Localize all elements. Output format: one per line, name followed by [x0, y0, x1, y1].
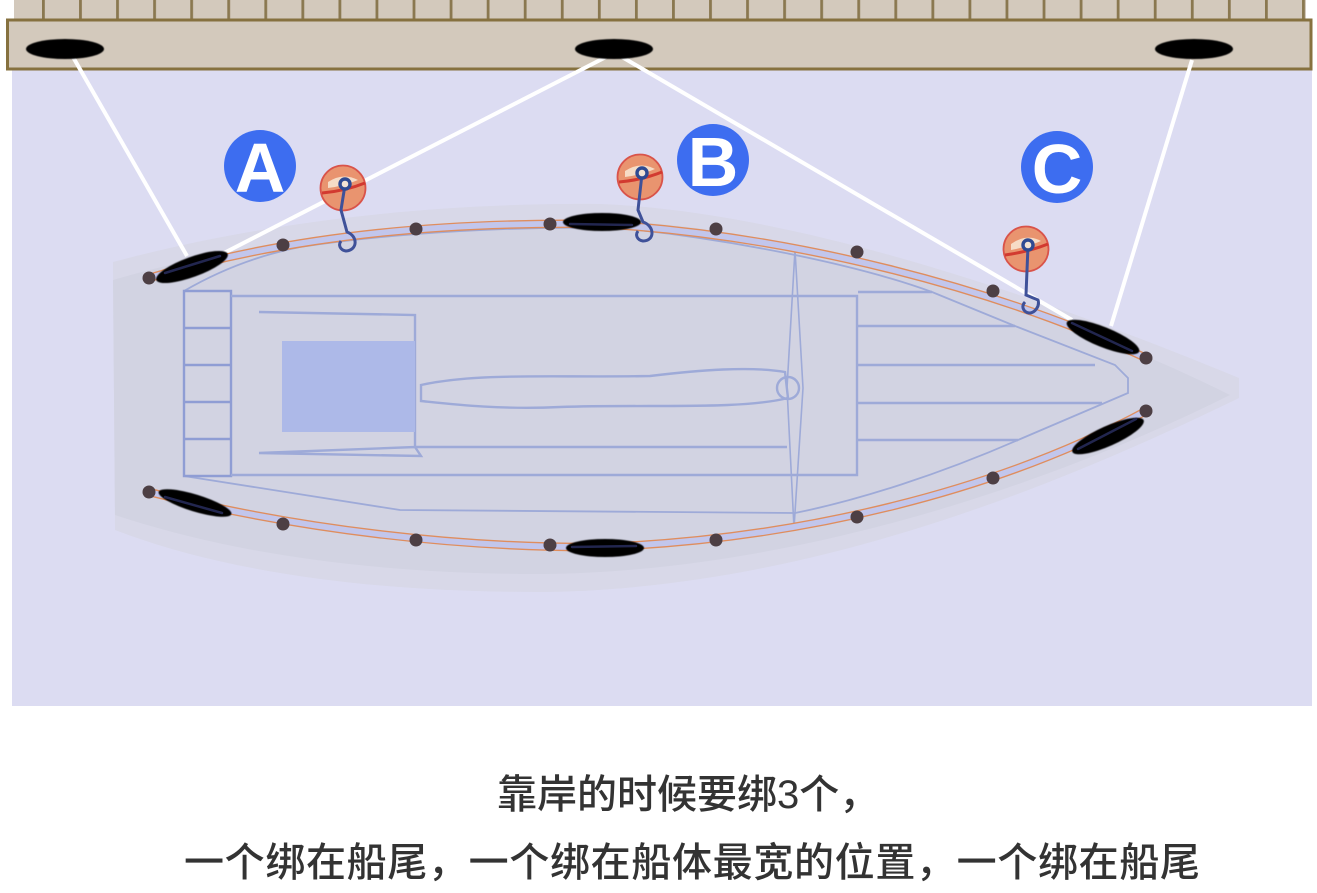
tiller: [421, 369, 788, 408]
fender A: [320, 166, 366, 251]
panel: water background: [12, 60, 1312, 706]
cleat rail overlays: [165, 224, 1136, 547]
dock: [8, 0, 1311, 69]
boat deck plan: [184, 228, 1128, 528]
caption: 靠岸的时候要绑3个，: [497, 773, 879, 817]
caption: [184, 773, 1200, 885]
inner hull outline: [184, 228, 1128, 513]
rail studs: [142, 218, 1152, 552]
cabin frame: [259, 312, 787, 456]
caption: 一个绑在船尾，一个绑在船体最宽的位置，一个绑在船尾: [184, 841, 1200, 885]
dock cleats: [26, 39, 1233, 59]
fender B: [618, 154, 662, 241]
mast frame: [787, 250, 803, 528]
fender C: [1004, 226, 1048, 313]
boat cleats: [153, 213, 1148, 557]
mooring lines: [73, 57, 1192, 326]
badge C: C: [1032, 130, 1082, 208]
cockpit lines: [231, 292, 1102, 475]
gunwale rails: [149, 224, 1146, 547]
badge B: B: [688, 123, 738, 201]
cabin hatch: [282, 341, 415, 432]
stern steps: [184, 291, 231, 476]
badge A: A: [235, 129, 285, 207]
boat hull shadow: [113, 204, 1239, 592]
rudder post: [777, 377, 799, 399]
